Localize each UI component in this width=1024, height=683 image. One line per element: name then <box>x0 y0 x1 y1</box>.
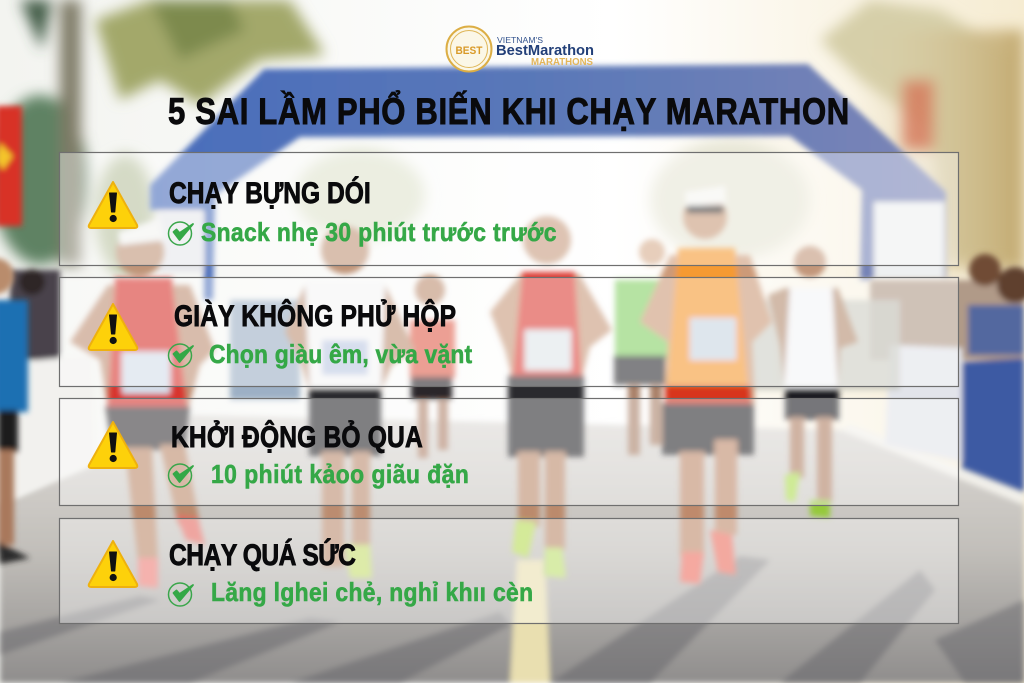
runner white right <box>768 246 858 518</box>
runner white centre-left <box>285 226 415 578</box>
panel: giày không phù hợp <box>60 278 958 386</box>
icon: warning <box>89 182 137 228</box>
title: 5 SAI LẦM PHỔ BIẾN KHI CHẠY MARATHON <box>168 89 849 133</box>
logo text: MARATHONS <box>531 57 593 68</box>
icon: check <box>168 222 193 245</box>
icon: check <box>168 464 193 487</box>
runner orange <box>640 186 772 584</box>
background: inflatable arch <box>150 64 946 300</box>
heading: CHẠY QUÁ SỨC <box>169 538 356 572</box>
runner small red <box>410 275 455 458</box>
logo text <box>496 36 594 68</box>
tip text: Chọn giàu êm, vừa vặnt <box>209 341 472 369</box>
runner red centre <box>490 216 612 578</box>
logo badge: BEST <box>456 45 483 57</box>
background: runners <box>0 186 858 588</box>
background: road <box>0 415 1024 683</box>
runner far left <box>0 258 30 564</box>
heading: CHẠY BỰNG DÓI <box>169 176 371 210</box>
panel: khởi động bỏ qua <box>60 398 958 506</box>
icon: warning <box>89 304 137 350</box>
icon: warning <box>89 541 137 587</box>
tip text: 10 phiút kảoo giãu đặn <box>211 461 469 489</box>
icon: check <box>168 344 193 367</box>
logo text: VIETNAM'S <box>497 36 543 45</box>
logo badge <box>446 26 492 72</box>
panel: chạy bụng đói <box>60 152 958 266</box>
panel: chạy quá sức <box>60 518 958 624</box>
tip text: Lăng lghei chẻ, nghỉ khıı cèn <box>211 579 533 607</box>
background: flag <box>0 106 22 226</box>
runner green back <box>614 239 670 455</box>
heading: KHỞI ĐỘNG BỎ QUA <box>171 419 423 454</box>
icon: warning <box>89 422 137 468</box>
icon: check <box>168 583 193 606</box>
background: palm trees and foliage <box>0 0 1024 275</box>
heading: GIÀY KHÔNG PHỬ HỘP <box>174 298 456 333</box>
logo: Vietnam's Best Marathon <box>446 26 594 72</box>
tip text: Snack nhẹ 30 phiút trước trước <box>201 219 557 247</box>
background: road shadows <box>0 556 1024 683</box>
runner red left <box>70 218 215 588</box>
logo text: BestMarathon <box>496 42 594 59</box>
background: crowd and barriers <box>10 254 1024 498</box>
